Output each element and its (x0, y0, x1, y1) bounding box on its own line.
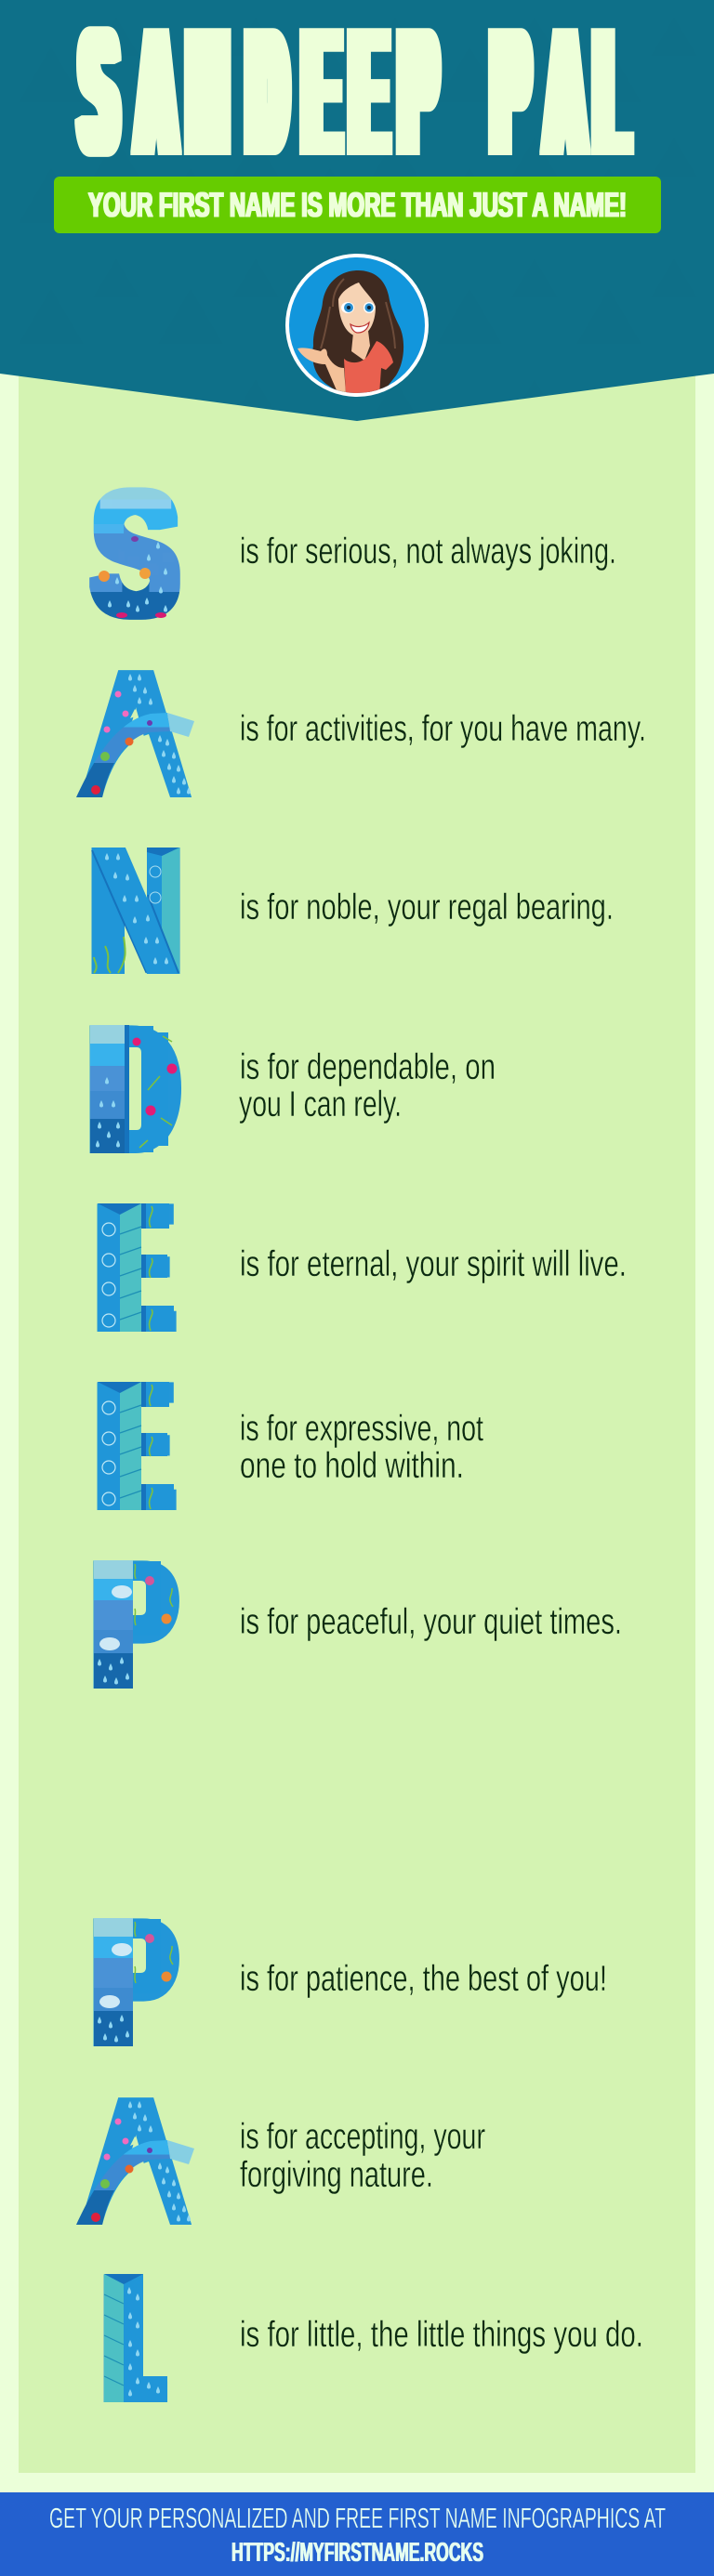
description: D: you I can rely. (239, 1084, 402, 1124)
letter E: E (91, 1163, 178, 1372)
letter A: A (81, 630, 191, 837)
description: D: is for dependable, on (240, 1047, 496, 1087)
description: E second: is for expressive, not (240, 1409, 483, 1449)
description: A second (240, 2117, 485, 2195)
letter S: S (91, 456, 179, 651)
icon: woman avatar (285, 254, 429, 397)
footer (0, 2492, 714, 2576)
footer url: HTTPS://MYFIRSTNAME.ROCKS (231, 2538, 483, 2568)
letter D: D (85, 986, 183, 1193)
letter P: P (86, 1520, 181, 1728)
header banner (0, 0, 714, 421)
letter N: N (86, 808, 185, 1014)
subtitle bar (54, 177, 661, 233)
description: E second: one to hold within. (240, 1446, 464, 1486)
description: A second: is for accepting, your (240, 2117, 485, 2157)
panel: letters background (19, 353, 695, 2473)
letter A second: A (81, 2057, 191, 2265)
description: E second (240, 1409, 483, 1486)
letter E second: E (91, 1342, 178, 1550)
description: A second: forgiving nature. (240, 2155, 433, 2195)
letter L: L (99, 2235, 168, 2443)
letter P second: P (86, 1878, 181, 2086)
description: D (239, 1047, 496, 1124)
